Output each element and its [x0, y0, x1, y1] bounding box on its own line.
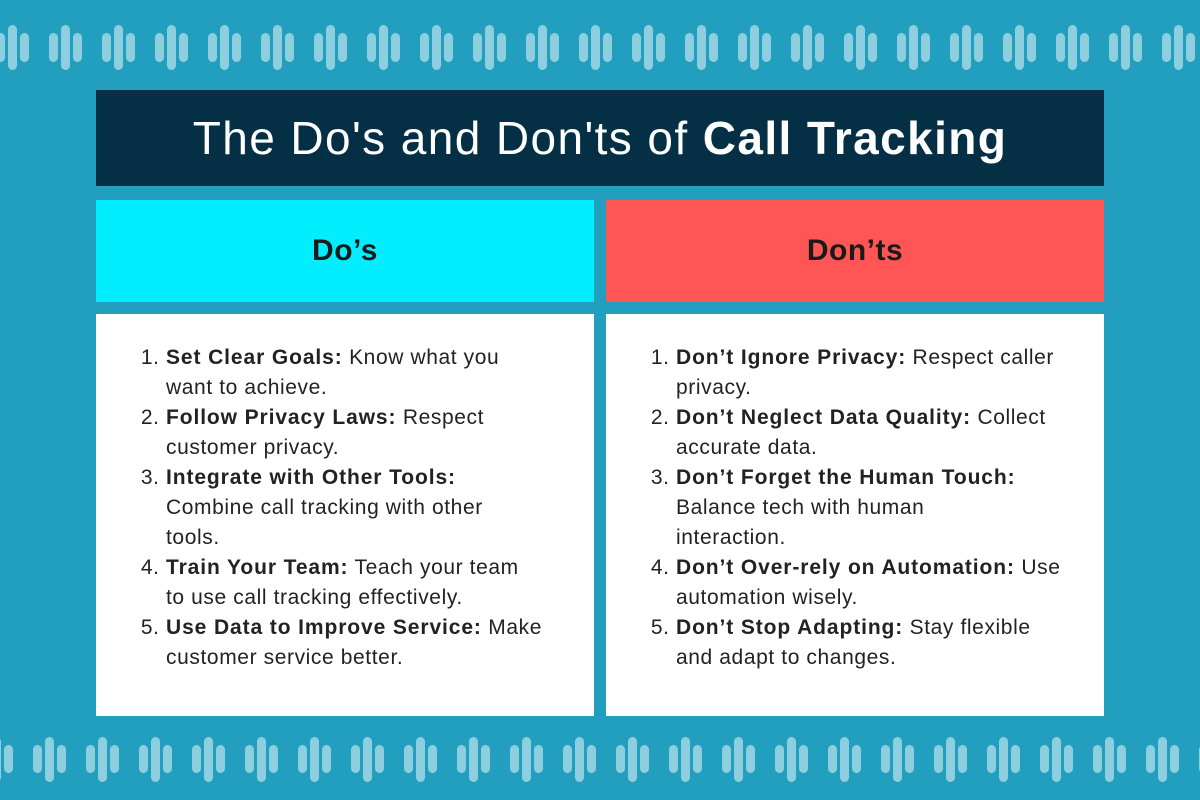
- panel: don'ts list: automation wisely.: [676, 586, 858, 609]
- panel: do's list: customer privacy.: [166, 436, 339, 459]
- panel: do's list: Integrate with Other Tools:: [166, 466, 456, 489]
- heading: Don'ts: [606, 200, 1104, 302]
- panel: do's list: Train Your Team: Teach your team: [166, 556, 519, 579]
- panel: do's list: [96, 314, 594, 716]
- heading: Do's: Do’s: [312, 234, 378, 267]
- panel: don'ts list: Don’t Ignore Privacy: Respect caller: [676, 346, 1054, 369]
- panel: don'ts list: Balance tech with human: [676, 496, 924, 519]
- panel: do's list: to use call tracking effectively.: [166, 586, 463, 609]
- heading: Don'ts: Don’ts: [807, 234, 903, 267]
- panel: don'ts list: accurate data.: [676, 436, 818, 459]
- panel: do's list: Use Data to Improve Service: Make: [166, 616, 542, 639]
- panel: don'ts list: Don’t Stop Adapting: Stay flexible: [676, 616, 1031, 639]
- panel: don'ts list: privacy.: [676, 376, 752, 399]
- panel: don'ts list: [606, 314, 1104, 716]
- panel: do's list: want to achieve.: [166, 376, 327, 399]
- panel: do's list: Follow Privacy Laws: Respect: [166, 406, 484, 429]
- panel: don'ts list: Don’t Over-rely on Automation: Use: [676, 556, 1060, 579]
- panel: do's list: Set Clear Goals: Know what you: [166, 346, 499, 369]
- panel: do's list: tools.: [166, 526, 220, 549]
- panel: do's list: customer service better.: [166, 646, 403, 669]
- panel: don'ts list: Don’t Neglect Data Quality: Collect: [676, 406, 1046, 429]
- title: [96, 90, 1104, 186]
- heading: Do's: [96, 200, 594, 302]
- title: The Do's and Don'ts of Call Tracking: [193, 112, 1007, 164]
- panel: don'ts list: Don’t Forget the Human Touch:: [676, 466, 1016, 489]
- panel: do's list: Combine call tracking with other: [166, 496, 483, 519]
- panel: don'ts list: and adapt to changes.: [676, 646, 896, 669]
- panel: don'ts list: interaction.: [676, 526, 786, 549]
